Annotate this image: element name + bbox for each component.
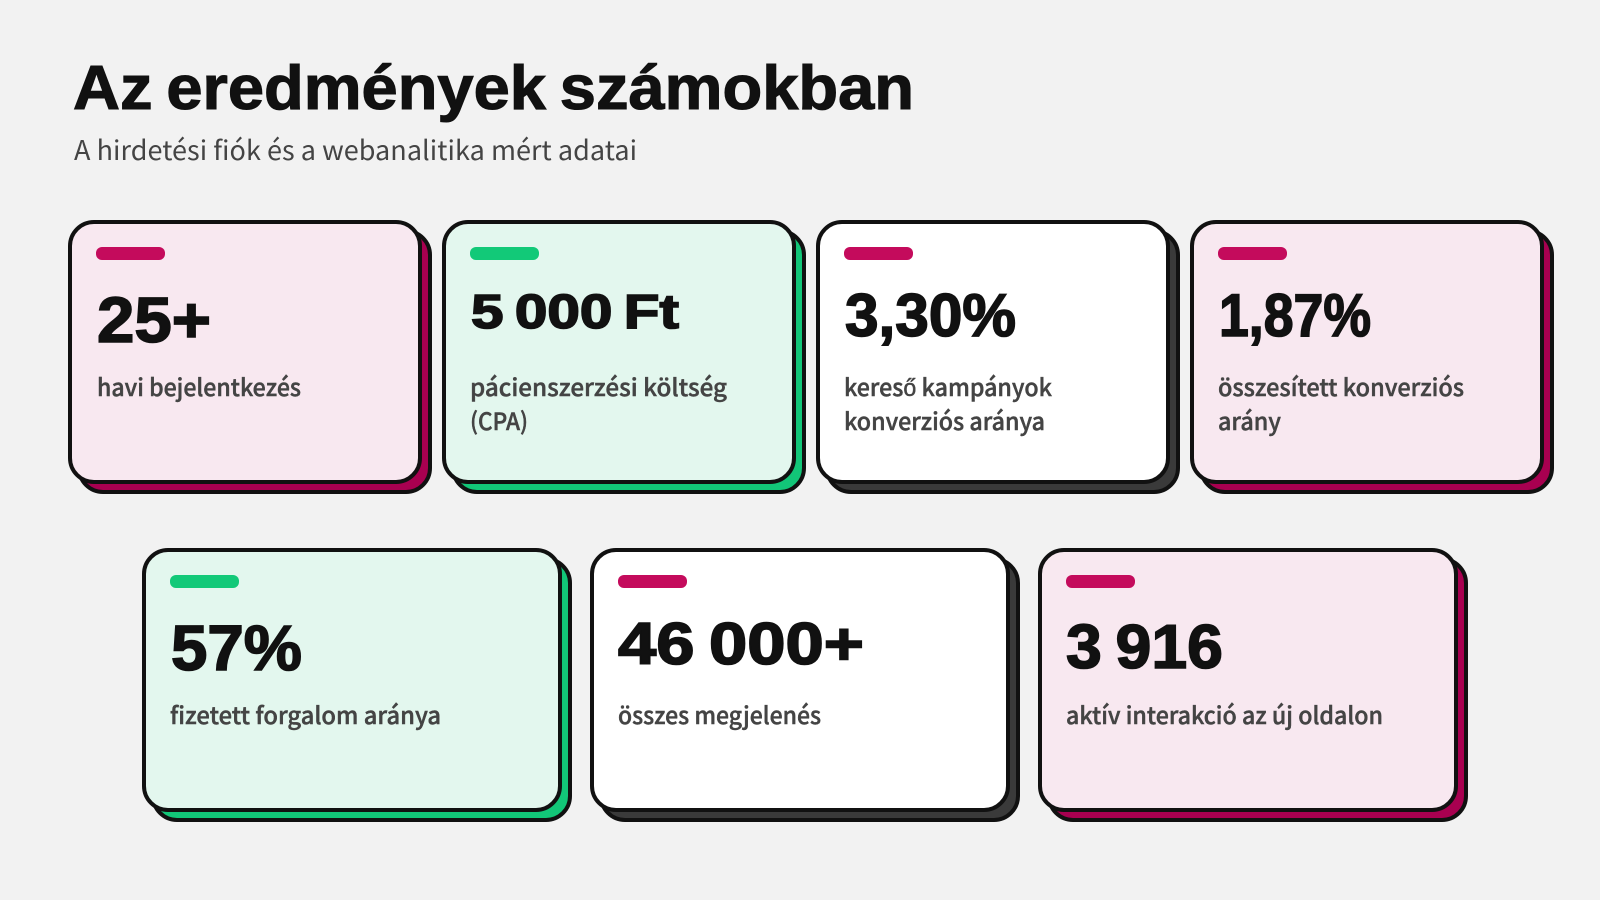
panel: havi bejelentkezés [70,222,430,492]
panel: havi bejelentkezés: 25+ [97,284,211,356]
panel: fizetett forgalom aránya: fizetett forgalom aránya [170,696,441,731]
panel: pácienszerzési költség: (CPA) [470,402,528,437]
panel: összes megjelenés [592,550,1018,820]
panel: összes megjelenés: 46 000+ [618,611,864,677]
panel: fizetett forgalom aránya [144,550,570,820]
panel: pácienszerzési költség [444,222,804,492]
panel: kereső kampányok konverziós aránya [818,222,1178,492]
panel: fizetett forgalom aránya: 57% [171,612,302,684]
panel: pácienszerzési költség: 5 000 Ft [471,286,679,339]
panel: kereső kampányok konverziós aránya: konverziós aránya [844,402,1045,437]
panel: összesített konverziós arány: arány [1218,402,1281,437]
title: Az eredmények számokban [73,54,914,123]
panel: pácienszerzési költség: pácienszerzési költség [470,368,727,403]
panel: összesített konverziós arány [1192,222,1552,492]
panel: kereső kampányok konverziós aránya: kereső kampányok [844,368,1052,403]
panel: aktív interakció az új oldalon: 3 916 [1066,613,1223,682]
panel: aktív interakció az új oldalon [1040,550,1466,820]
subtitle: A hirdetési fiók és a webanalitika mért adatai [74,129,637,168]
panel: összesített konverziós arány: összesített konverziós [1218,368,1464,403]
panel: kereső kampányok konverziós aránya: 3,30% [845,282,1016,349]
panel: összesített konverziós arány: 1,87% [1219,282,1371,349]
panel: összes megjelenés: összes megjelenés [618,696,821,731]
panel: havi bejelentkezés: havi bejelentkezés [97,368,301,403]
panel: aktív interakció az új oldalon: aktív interakció az új oldalon [1066,696,1383,731]
